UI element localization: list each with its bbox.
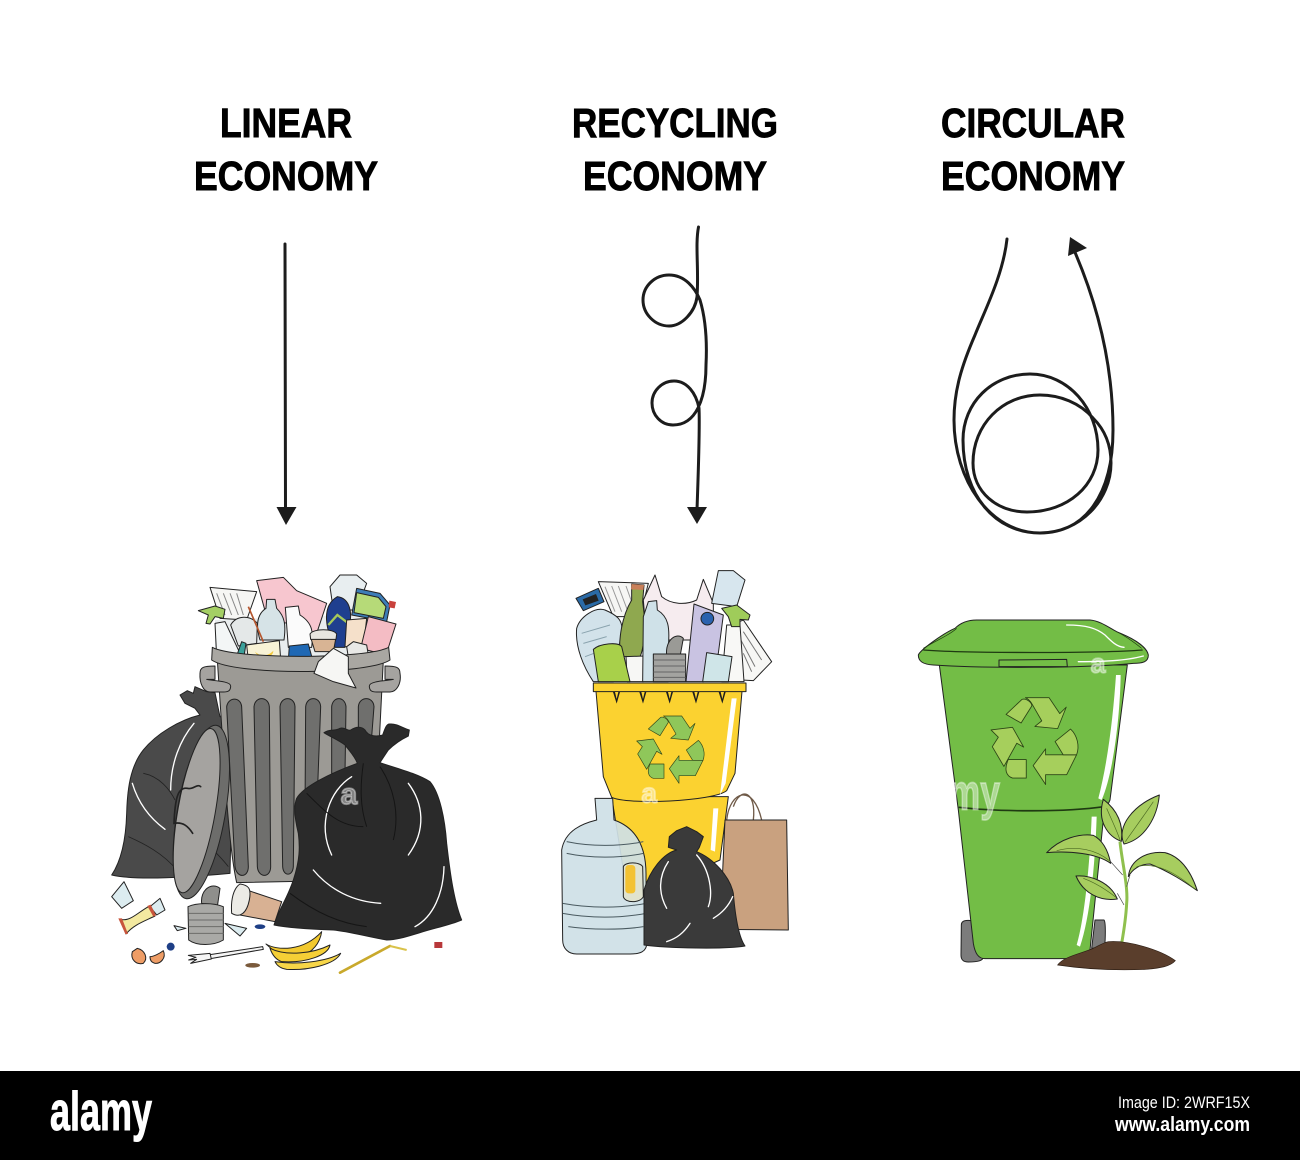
lower bin section — [612, 797, 728, 893]
paper shopping bag — [720, 794, 788, 930]
apple core — [118, 898, 165, 934]
footer: image id and website — [1114, 1093, 1250, 1136]
upper bin section with rim — [593, 683, 746, 852]
front garbage bag: a — [341, 778, 358, 811]
arrow: recycling flow with two loops — [643, 227, 707, 524]
seedling — [1047, 795, 1197, 943]
egg shells — [132, 948, 164, 964]
metal can body — [200, 660, 400, 883]
footer: image id and website: www.alamy.com — [1114, 1114, 1250, 1136]
front garbage bag — [274, 724, 462, 940]
illustration: yellow recycling bin with waste — [562, 571, 788, 954]
upright can lid with handle — [162, 721, 240, 903]
illustration: overflowing trash can with bags — [112, 575, 462, 973]
broken glass shards — [112, 882, 247, 936]
heading: recycling economy: RECYCLING — [572, 100, 778, 146]
heading: recycling economy: ECONOMY — [583, 153, 767, 199]
waste sticking out of bin — [576, 571, 772, 682]
large water jug — [562, 798, 647, 954]
bin lid — [918, 620, 1148, 667]
arrow: circular flow looping back up — [954, 237, 1113, 533]
icon: recycling symbol — [991, 698, 1078, 785]
can rim — [212, 647, 390, 671]
back garbage bag — [112, 687, 233, 878]
drinking straw — [340, 946, 407, 973]
soil mound — [1058, 941, 1175, 970]
watermark fragments — [949, 649, 1106, 820]
tin can — [188, 886, 223, 944]
footer: alamy logo: alamy — [50, 1080, 152, 1142]
heading: circular economy: CIRCULAR — [941, 100, 1125, 146]
heading: recycling economy — [572, 100, 778, 199]
heading: linear economy: ECONOMY — [194, 153, 378, 199]
footer: black credit bar — [0, 1071, 1300, 1160]
fallen coffee cup — [231, 884, 282, 922]
plastic fork — [188, 947, 263, 963]
heading: circular economy: ECONOMY — [941, 153, 1125, 199]
arrow: straight linear flow — [276, 244, 296, 525]
heading: linear economy — [194, 100, 378, 199]
crumpled white cloth — [314, 648, 356, 688]
heading: linear economy: LINEAR — [220, 100, 352, 146]
icon: recycling symbol — [637, 716, 704, 783]
small garbage bag — [644, 827, 745, 948]
footer: image id and website: Image ID: 2WRF15X — [1118, 1093, 1250, 1112]
loose bottle caps — [167, 924, 442, 968]
trash overflowing from the can — [198, 575, 396, 660]
watermark fragment: a — [641, 778, 657, 809]
banana peel — [266, 932, 341, 970]
bin wheels — [961, 920, 1105, 962]
watermark fragments: a — [1091, 649, 1106, 679]
illustration: green wheelie bin with seedling — [918, 620, 1197, 970]
watermark fragments: my — [949, 764, 1000, 820]
bin body — [939, 665, 1127, 959]
heading: circular economy — [941, 100, 1125, 199]
